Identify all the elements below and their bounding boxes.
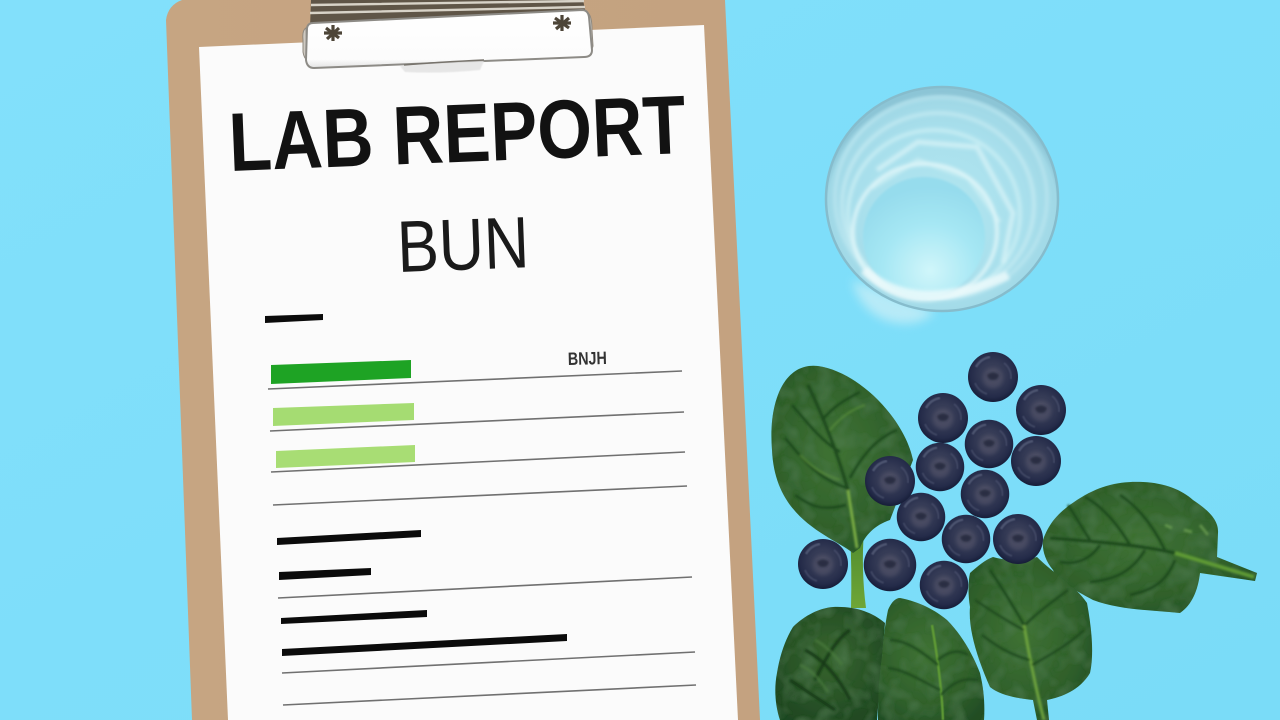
glass inner rings [835,97,1047,300]
paper sheet [199,25,738,720]
glass rim and body [826,87,1058,311]
subtitle: BUN: BUN [396,202,530,288]
clipboard backing board [166,0,760,720]
spinach leaves [771,366,1257,720]
leaf: bottom centre [878,598,984,720]
water glass [826,87,1058,324]
leaf: right [1043,482,1257,613]
glass base [863,177,985,297]
leaf: bottom middle [968,557,1092,720]
leaf: top left [771,366,913,608]
green result bars [271,360,415,468]
short header bar [265,314,323,323]
report rule lines [268,371,696,705]
clipboard [166,0,760,720]
title: LAB REPORT: LAB REPORT [227,78,687,189]
small label: BNJH [568,348,607,369]
glass shadow [852,280,935,324]
leaf: bottom left [775,607,885,720]
black text bars [277,530,567,656]
metal clip [303,0,593,73]
clip rivets [324,15,571,41]
blueberries [798,352,1066,609]
